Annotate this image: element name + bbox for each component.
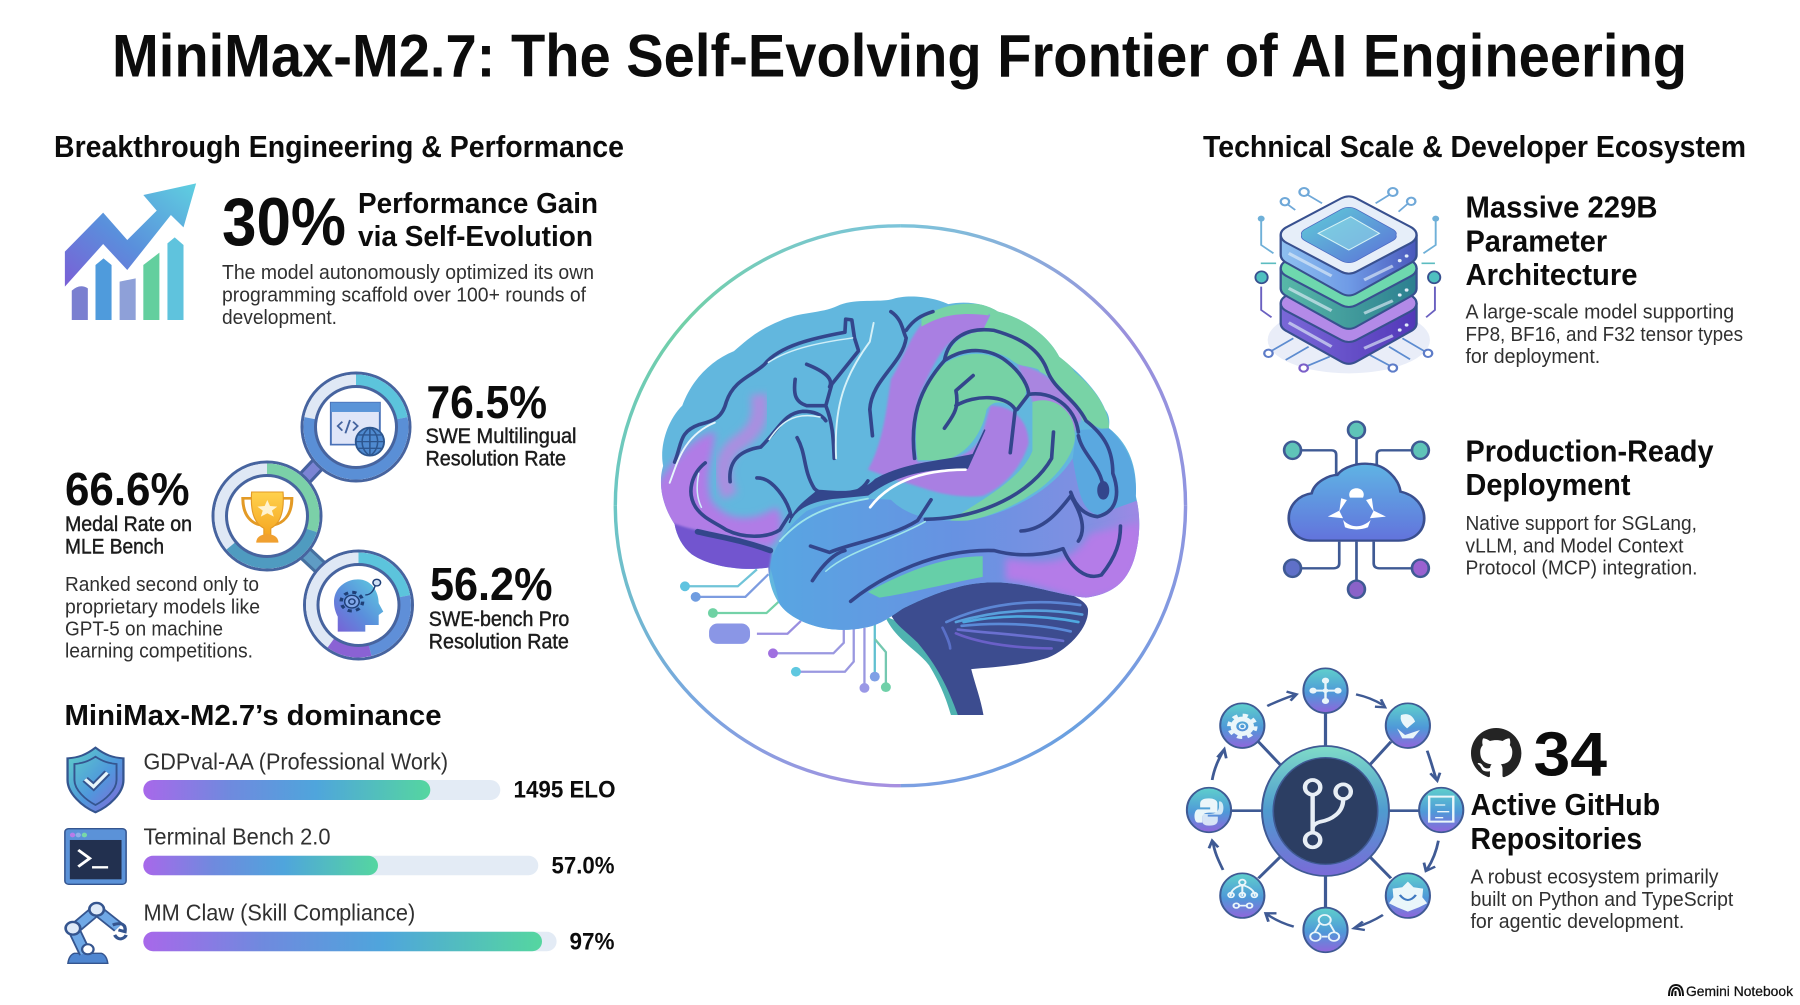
- panel: github ecosystem: [1187, 668, 1734, 952]
- heading: production-ready deployment: [1466, 434, 1714, 502]
- stat: 66.6% medal rate: Medal Rate on: [65, 513, 192, 536]
- stat: 56.2% SWE-bench pro: [429, 558, 569, 654]
- brain cortex: [654, 289, 1147, 639]
- text: github description: A robust ecosystem primarily: [1470, 866, 1718, 888]
- text: github description: [1470, 866, 1734, 933]
- icon glyphs in satellite nodes: [1195, 678, 1453, 912]
- heading: production-ready deployment: Deployment: [1466, 467, 1630, 502]
- stat: 56.2% SWE-bench pro: SWE-bench Pro: [429, 608, 569, 631]
- stat: 66.6% medal rate: 66.6%: [65, 463, 190, 515]
- stat: 30%: 30%: [222, 184, 346, 260]
- panel: dominance: [64, 700, 616, 963]
- stat: 76.5% SWE multilingual: [426, 376, 576, 471]
- watermark: gemini notebook: Gemini Notebook: [1686, 983, 1794, 999]
- connector: middle ring to bottom ring: [305, 553, 321, 568]
- text: github description: for agentic development.: [1470, 911, 1684, 933]
- text: ranking note: proprietary models like: [65, 596, 260, 618]
- text: performance description: development.: [222, 307, 337, 329]
- circuit traces: [680, 569, 891, 693]
- text: deployment description: Native support for SGLang,: [1466, 513, 1697, 535]
- heading: massive 229B: Massive 229B: [1466, 190, 1658, 225]
- panel: production deployment: [1284, 422, 1714, 598]
- heading: massive 229B: [1466, 190, 1658, 292]
- panel: central brain: [615, 226, 1186, 786]
- bar row: Terminal Bench: 57.0%: [552, 853, 614, 880]
- brain folds: [675, 312, 1120, 601]
- heading: performance gain via self-evolution: via Self-Evolution: [358, 221, 593, 253]
- icon: trophy: [243, 492, 292, 543]
- icon: terminal: [65, 829, 126, 884]
- text: ranking note: Ranked second only to: [65, 574, 259, 596]
- text: github description: built on Python and TypeScript: [1470, 889, 1734, 911]
- panel: benchmark rings: [65, 373, 576, 663]
- ring: MLE bench medal rate: [213, 462, 321, 570]
- heading: performance gain via self-evolution: [358, 188, 598, 253]
- text: architecture description: for deployment.: [1466, 346, 1600, 368]
- circle outline: [615, 226, 1186, 786]
- bar row: MM Claw: [143, 900, 615, 955]
- title: MiniMax-M2.7: The Self-Evolving Frontier of AI Engineering: [112, 22, 1687, 90]
- bar row: MM Claw: MM Claw (Skill Compliance): [144, 900, 415, 926]
- text: performance description: programming scaffold over 100+ rounds of: [222, 284, 586, 306]
- text: ranking note: GPT-5 on machine: [65, 619, 223, 641]
- icon: growth chart with arrow: [65, 183, 196, 320]
- icon: head with gear: [334, 579, 383, 632]
- text: ranking note: [65, 574, 260, 663]
- stat: 66.6% medal rate: [65, 463, 192, 558]
- text: architecture description: FP8, BF16, and F32 tensor types: [1466, 324, 1743, 346]
- heading: active github repositories: Repositories: [1470, 821, 1642, 856]
- brain highlights: [670, 323, 965, 571]
- heading: production-ready deployment: Production-Ready: [1466, 434, 1714, 469]
- icon: repository hub: [1187, 668, 1463, 952]
- bar row: Terminal Bench: Terminal Bench 2.0: [144, 824, 330, 850]
- stat: 66.6% medal rate: MLE Bench: [65, 535, 164, 558]
- text: deployment description: vLLM, and Model Context: [1466, 535, 1684, 557]
- stat: 76.5% SWE multilingual: 76.5%: [426, 376, 547, 428]
- heading: dominance: MiniMax-M2.7’s dominance: [64, 700, 442, 732]
- heading: breakthrough engineering: Breakthrough Engineering & Performance: [54, 129, 624, 164]
- panel: performance gain: [65, 183, 598, 329]
- stat: 34: 34: [1534, 721, 1608, 790]
- icon: server stack: [1255, 188, 1440, 373]
- bar row: GDPval-AA: [143, 748, 616, 804]
- heading: active github repositories: [1470, 787, 1660, 856]
- text: performance description: The model autonomously optimized its own: [222, 262, 594, 284]
- panel: 229B architecture: [1255, 188, 1743, 373]
- heading: active github repositories: Active GitHub: [1470, 787, 1660, 822]
- stat: 76.5% SWE multilingual: Resolution Rate: [426, 448, 566, 471]
- heading: technical scale: Technical Scale & Developer Ecosystem: [1203, 129, 1746, 164]
- icon: browser code globe: [331, 403, 384, 456]
- text: architecture description: [1466, 302, 1743, 368]
- text: deployment description: Protocol (MCP) integration.: [1466, 558, 1698, 580]
- icon: github mark: [1471, 728, 1521, 777]
- text: architecture description: A large-scale model supporting: [1466, 302, 1734, 324]
- heading: massive 229B: Architecture: [1466, 257, 1638, 292]
- stat: 56.2% SWE-bench pro: Resolution Rate: [429, 630, 569, 654]
- bar row: GDPval-AA: GDPval-AA (Professional Work): [144, 748, 448, 774]
- stat: 56.2% SWE-bench pro: 56.2%: [430, 558, 552, 610]
- bar row: GDPval-AA: 1495 ELO: [514, 777, 616, 804]
- ring: SWE multilingual: [302, 373, 410, 481]
- ring: SWE-bench pro: [304, 551, 412, 659]
- icon: robot arm: [66, 903, 126, 963]
- text: ranking note: learning competitions.: [65, 641, 253, 663]
- connector: top ring to middle ring: [305, 462, 320, 478]
- stat: 76.5% SWE multilingual: SWE Multilingual: [426, 425, 576, 448]
- icon: cloud network: [1284, 422, 1429, 598]
- heading: massive 229B: Parameter: [1466, 224, 1607, 258]
- text: deployment description: [1466, 513, 1698, 580]
- icon: shield: [68, 748, 123, 812]
- brain stem and cerebellum: [885, 582, 1088, 715]
- heading: performance gain via self-evolution: Performance Gain: [358, 188, 598, 220]
- bar row: MM Claw: 97%: [570, 928, 614, 955]
- bar row: Terminal Bench: [143, 824, 615, 880]
- text: performance description: [222, 262, 594, 329]
